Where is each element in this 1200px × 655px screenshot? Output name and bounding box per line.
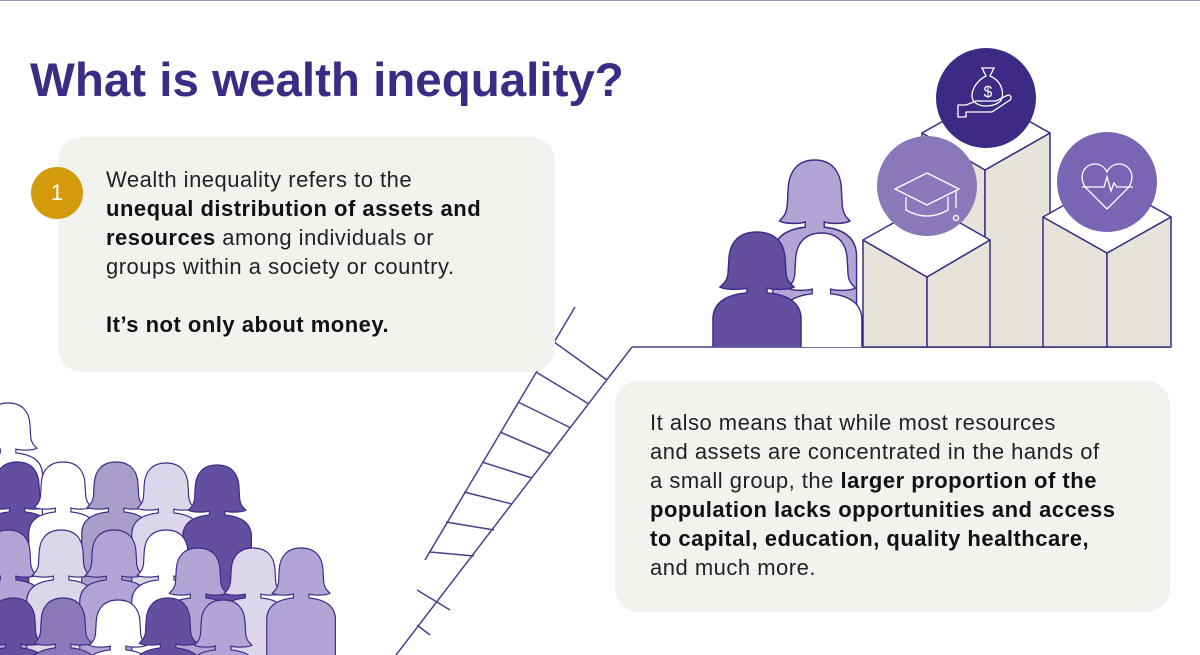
definition text: It’s not only about money. <box>106 312 389 337</box>
panel: explanation <box>615 381 1170 612</box>
columns <box>863 97 1171 347</box>
icon: heart <box>1057 132 1157 232</box>
panel: definition <box>58 137 555 372</box>
icon: money <box>936 48 1036 148</box>
people near columns <box>712 159 862 347</box>
definition text: resources among individuals or <box>106 225 434 250</box>
definition text: Wealth inequality refers to the <box>106 167 412 192</box>
title: What is wealth inequality? <box>30 54 624 107</box>
number badge: 1 <box>51 180 63 205</box>
explanation text: and assets are concentrated in the hands of <box>650 439 1100 464</box>
explanation text: It also means that while most resources <box>650 410 1056 435</box>
definition text: groups within a society or country. <box>106 254 454 279</box>
explanation text <box>650 410 1115 580</box>
explanation text: a small group, the larger proportion of the <box>650 468 1097 493</box>
icon: money: $ <box>984 84 993 101</box>
explanation text: and much more. <box>650 555 816 580</box>
definition text: unequal distribution of assets and <box>106 196 481 221</box>
explanation text: to capital, education, quality healthcare, <box>650 526 1089 551</box>
definition text <box>106 167 481 337</box>
number badge <box>31 167 83 219</box>
explanation text: population lacks opportunities and access <box>650 497 1115 522</box>
ladder <box>396 307 1170 655</box>
icon: graduation cap <box>877 136 977 236</box>
crowd <box>0 403 335 655</box>
